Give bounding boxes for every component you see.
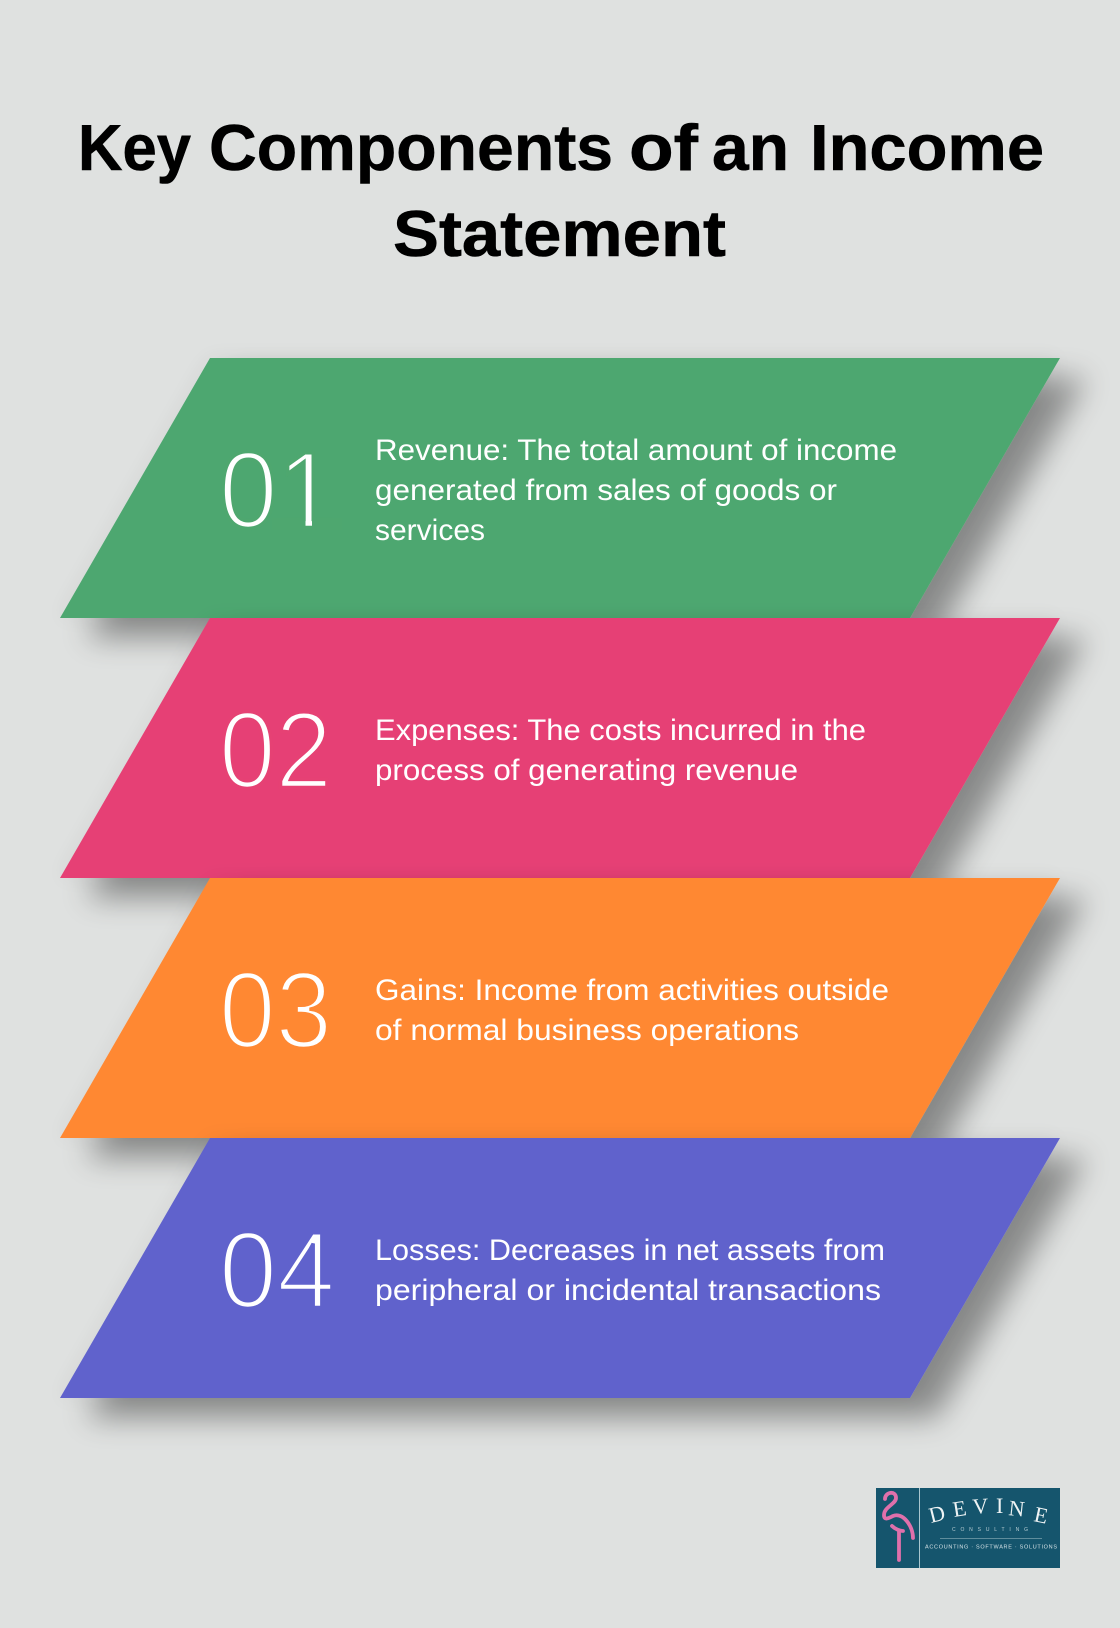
- text: gains: of normal business operations: [375, 1014, 799, 1047]
- logo: Devine Consulting: [876, 1488, 1060, 1568]
- icon: flamingo: [884, 1493, 913, 1560]
- title: Statement: [393, 197, 726, 270]
- text: revenue: Revenue: The total amount of income: [375, 434, 897, 467]
- green parallelogram: [60, 358, 1060, 618]
- panel: 04 losses: [60, 1138, 1060, 1398]
- title: Components: [209, 111, 613, 184]
- logo wordmark: I: [996, 1493, 1003, 1518]
- text: gains: [375, 974, 889, 1047]
- title: an: [712, 111, 789, 184]
- logo wordmark: E: [951, 1495, 968, 1522]
- logo wordmark: D: [926, 1500, 948, 1528]
- text: revenue: services: [375, 514, 485, 547]
- panel: 02 expenses: [60, 618, 1060, 878]
- blue parallelogram: [60, 1138, 1060, 1398]
- divider: [919, 1488, 920, 1568]
- title: [78, 111, 1044, 270]
- logo wordmark: E: [1032, 1501, 1050, 1529]
- text: revenue: generated from sales of goods or: [375, 474, 837, 507]
- panel: 03 gains: [60, 878, 1060, 1138]
- title: of: [629, 111, 698, 184]
- text: losses: Losses: Decreases in net assets from: [375, 1234, 885, 1267]
- number 01: 01: [219, 430, 336, 552]
- logo tagline: CONSULTING: [952, 1527, 1028, 1533]
- text: revenue: [375, 434, 897, 547]
- pink parallelogram: [60, 618, 1060, 878]
- title: Income: [810, 111, 1044, 184]
- title: Key: [78, 111, 191, 184]
- text: expenses: Expenses: The costs incurred in the: [375, 714, 866, 747]
- number 03: 03: [219, 950, 332, 1072]
- orange parallelogram: [60, 878, 1060, 1138]
- number 02: 02: [219, 690, 332, 812]
- text: gains: Gains: Income from activities outside: [375, 974, 889, 1007]
- text: losses: [375, 1234, 885, 1307]
- logo wordmark: N: [1007, 1495, 1026, 1522]
- text: expenses: process of generating revenue: [375, 754, 798, 787]
- text: losses: peripheral or incidental transactions: [375, 1274, 881, 1307]
- logo wordmark: V: [972, 1493, 989, 1519]
- text: expenses: [375, 714, 866, 787]
- number 04: 04: [219, 1210, 335, 1332]
- panel: 01 revenue: [60, 358, 1060, 618]
- logo subtitle: ACCOUNTING · SOFTWARE · SOLUTIONS: [925, 1544, 1057, 1550]
